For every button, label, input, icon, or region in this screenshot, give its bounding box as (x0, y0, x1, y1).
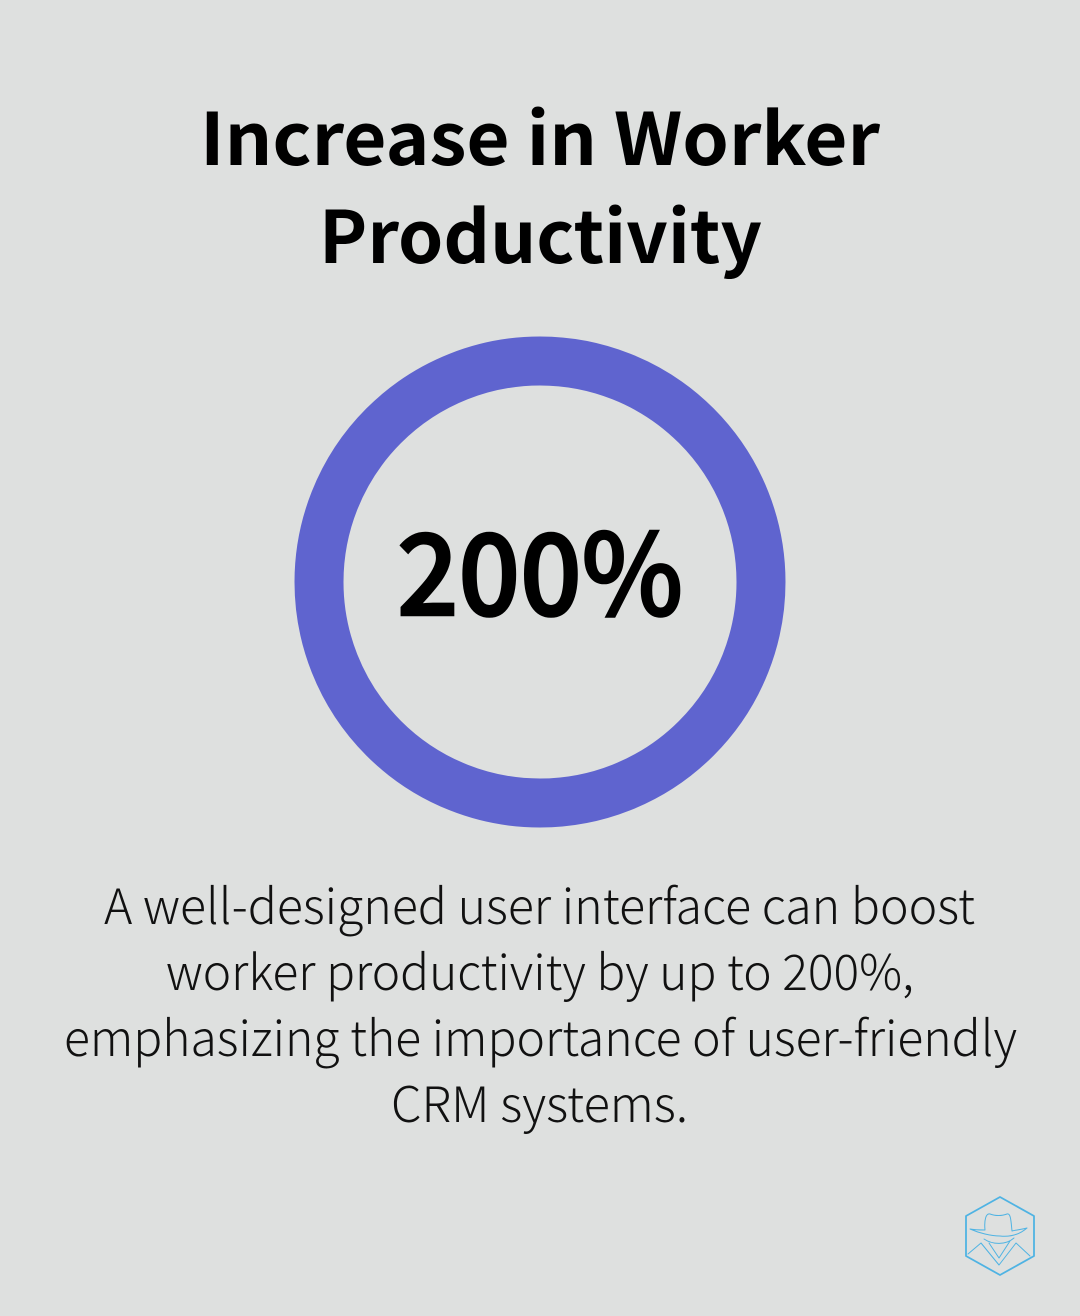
donut ring (319, 361, 761, 803)
description text: emphasizing the importance of user-friendly (64, 1000, 1017, 1071)
title (200, 81, 881, 284)
description text (64, 868, 1017, 1137)
description text: A well-designed user interface can boost (104, 868, 975, 939)
icon: hexagon spy logo (966, 1197, 1034, 1275)
big number: 200% (397, 486, 683, 648)
title: Productivity (319, 179, 762, 284)
description text: CRM systems. (391, 1066, 688, 1137)
title: Increase in Worker (200, 81, 881, 186)
description text: worker productivity by up to 200%, (166, 934, 914, 1005)
